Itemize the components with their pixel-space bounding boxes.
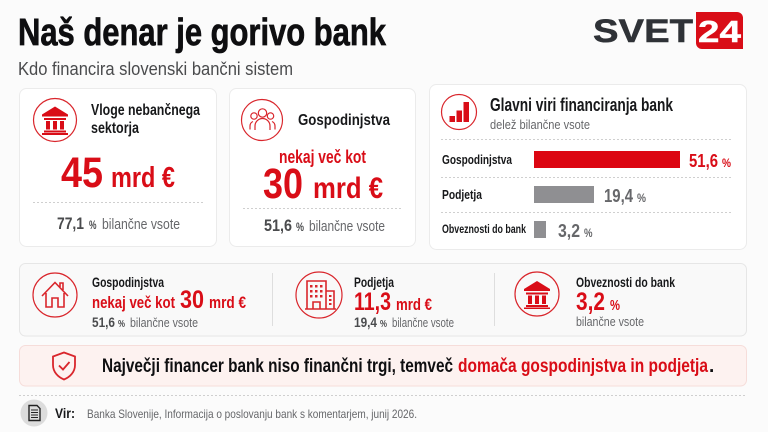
source: Vir: — [55, 405, 75, 421]
item: liabilities to banks: % — [610, 297, 620, 314]
item: households: mrd € — [209, 294, 246, 312]
callout: key message: domača gospodinjstva in podjetja — [458, 356, 708, 377]
item: liabilities to banks — [515, 272, 675, 329]
item: liabilities to banks: bilančne vsote — [576, 314, 644, 329]
source: Banka Slovenije, Informacija o poslovanju bank s komentarjem, junij 2026. — [87, 407, 417, 421]
item: households: nekaj več kot — [92, 293, 175, 312]
share: 77,1 %: bilančne vsote — [102, 217, 180, 233]
value: nekaj več kot 30 mrd €: 30 — [263, 160, 303, 208]
value: nekaj več kot 30 mrd €: nekaj več kot — [279, 147, 366, 167]
value: 45 mrd €: 45 — [61, 149, 103, 197]
logo: SVET24: SVET — [593, 13, 694, 49]
source — [55, 405, 417, 421]
item: households: 30 — [180, 286, 204, 314]
bar: companies: 19,4 — [604, 186, 633, 206]
item: liabilities to banks: Obveznosti do bank — [576, 275, 675, 290]
logo: SVET24 — [593, 12, 743, 49]
item: households: 51,6 — [92, 315, 115, 330]
bar: households: % — [722, 156, 731, 170]
value: nekaj več kot 30 mrd €: mrd € — [313, 172, 383, 205]
item: companies: 19,4 — [354, 315, 377, 330]
item: companies: 11,3 — [354, 288, 391, 316]
heading — [91, 102, 200, 137]
panel: non-bank deposits — [20, 88, 216, 246]
item: companies — [296, 272, 454, 330]
panel: breakdown strip — [20, 264, 746, 336]
item: companies: mrd € — [396, 296, 432, 314]
callout: key message: . — [709, 356, 714, 377]
title: Naš denar je gorivo bank — [18, 12, 387, 54]
share: 51,6 %: 51,6 — [264, 216, 292, 235]
share: 51,6 %: bilančne vsote — [309, 219, 385, 235]
item: households: % — [118, 318, 125, 330]
subheading: delež bilančne vsote — [490, 117, 590, 132]
bar: companies — [442, 186, 646, 206]
item: companies: bilančne vsote — [392, 315, 454, 330]
icon: people — [242, 100, 282, 140]
logo: SVET24: 24 — [698, 14, 742, 49]
bar: households: 51,6 — [689, 151, 718, 171]
value: 45 mrd € — [61, 149, 175, 197]
share: 51,6 % — [264, 216, 385, 235]
item: liabilities to banks: 3,2 — [576, 288, 605, 316]
bar: companies: % — [637, 191, 646, 205]
icon: bank — [515, 272, 559, 316]
heading: Gospodinjstva — [298, 112, 390, 129]
icon: house — [33, 273, 77, 317]
icon: bank — [34, 98, 76, 142]
item: households: bilančne vsote — [130, 315, 198, 330]
icon: shield with check — [53, 352, 75, 380]
share: 51,6 %: % — [296, 220, 304, 234]
bar: liabilities to banks: 3,2 — [558, 221, 580, 241]
share: 77,1 %: 77,1 — [57, 214, 84, 233]
share: 77,1 % — [57, 214, 180, 233]
bar: companies: Podjetja — [442, 187, 483, 202]
item: households — [33, 273, 246, 330]
icon: bar chart — [442, 94, 476, 130]
bar: liabilities to banks: Obveznosti do bank — [442, 222, 526, 236]
item: companies: Podjetja — [354, 275, 394, 290]
panel: main funding sources — [430, 84, 746, 250]
bar: households: Gospodinjstva — [442, 152, 513, 167]
item: companies: % — [380, 318, 387, 330]
share: 77,1 %: % — [89, 218, 97, 232]
item: households: Gospodinjstva — [92, 275, 164, 290]
bar: liabilities to banks: % — [584, 226, 593, 240]
heading: Vloge nebančnega — [91, 102, 200, 119]
heading: Glavni viri financiranja bank — [490, 95, 674, 115]
value: 45 mrd €: mrd € — [111, 162, 175, 194]
bar: liabilities to banks — [442, 221, 593, 241]
bar: households — [442, 151, 731, 171]
value: nekaj več kot 30 mrd € — [263, 147, 383, 208]
heading: sektorja — [91, 120, 139, 137]
callout: key message: Največji financer bank niso finančni trgi, temveč — [102, 356, 453, 377]
icon: office buildings — [296, 272, 342, 318]
icon: document — [20, 400, 48, 426]
panel: households — [230, 88, 416, 246]
callout: key message — [20, 346, 746, 386]
subtitle: Kdo financira slovenski bančni sistem — [18, 58, 293, 79]
